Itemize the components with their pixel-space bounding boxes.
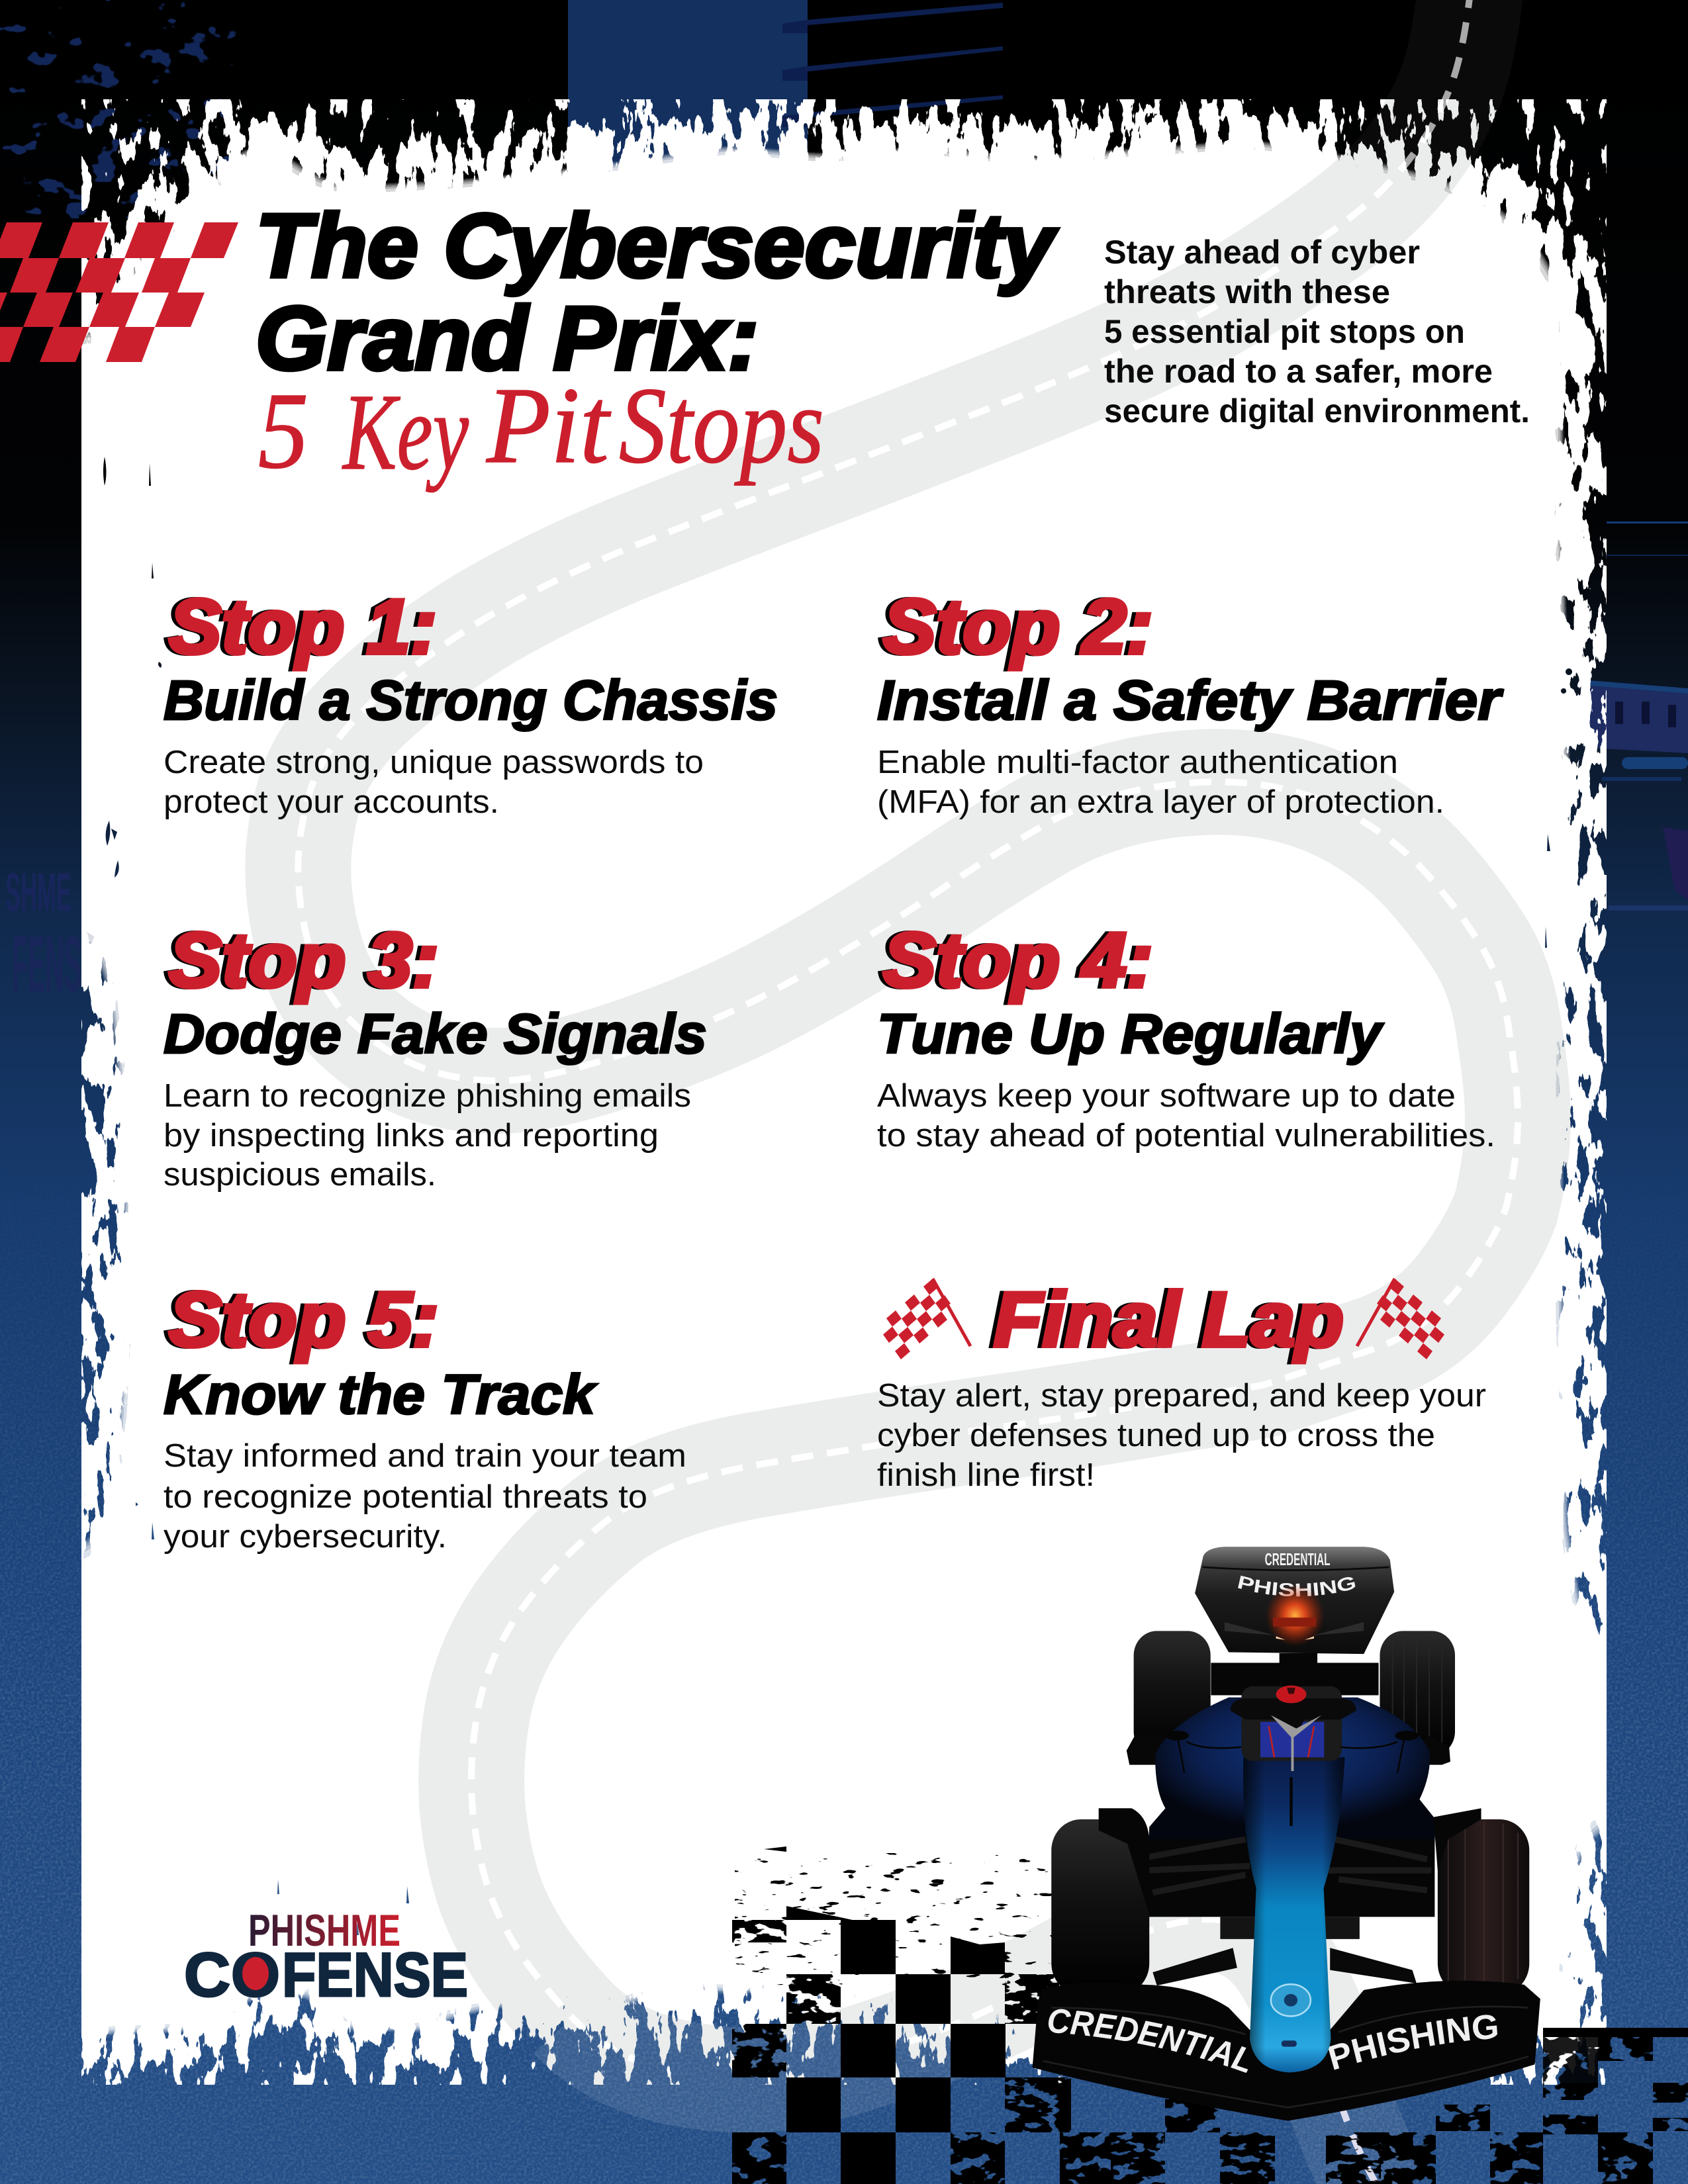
checkered flag ground xyxy=(732,1846,1688,2184)
mirrors xyxy=(1165,1731,1419,1773)
heading: Final Lap: Final Lap xyxy=(994,1276,1344,1363)
body text: finish line first! xyxy=(877,1457,1095,1493)
body text xyxy=(164,745,704,820)
body text: Create strong, unique passwords to xyxy=(164,745,704,780)
subheading: Know the Track xyxy=(164,1363,598,1426)
rear wing xyxy=(1195,1547,1394,1655)
rear lights xyxy=(1266,1584,1325,1647)
logo: PhishMe Cofense: PHISHME xyxy=(248,1905,400,1956)
body text: to recognize potential threats to xyxy=(164,1479,647,1515)
heading: Stop 4: Stop 4: xyxy=(883,917,1153,1003)
body text xyxy=(164,1078,691,1193)
intro text: Stay ahead of cyber xyxy=(1104,234,1420,271)
panel: stop 2 xyxy=(877,583,1504,820)
icon: right checkered flag xyxy=(1357,1279,1450,1359)
heading: Stop 3: Stop 3: xyxy=(169,917,439,1003)
body text xyxy=(164,1438,686,1555)
heading: Final Lap: Final Lap xyxy=(990,1276,1340,1363)
subtitle: 5 Key Pit Stops xyxy=(258,365,824,492)
title xyxy=(256,195,1058,388)
title: Grand Prix: xyxy=(256,288,759,388)
front tyres xyxy=(1051,1808,1529,1995)
race car: Credential Phishing xyxy=(1033,1547,1540,2120)
heading: Stop 4: Stop 4: xyxy=(879,917,1149,1003)
background: stadium night scene: FENS xyxy=(12,920,81,1009)
subheading: Install a Safety Barrier xyxy=(877,669,1504,731)
intro text: the road to a safer, more xyxy=(1104,353,1493,390)
body text: cyber defenses tuned up to cross the xyxy=(877,1418,1435,1453)
side pods xyxy=(1149,1698,1436,1844)
heading: Stop 5: Stop 5: xyxy=(165,1276,435,1363)
heading: Stop 1: Stop 1: xyxy=(165,583,433,670)
panel: stop 5 xyxy=(164,1276,686,1555)
intro text: secure digital environment. xyxy=(1104,392,1530,430)
body text: protect your accounts. xyxy=(164,784,499,820)
rear wing: CREDENTIAL xyxy=(1265,1551,1331,1569)
logo: PhishMe Cofense: O xyxy=(231,1940,280,2009)
body text: (MFA) for an extra layer of protection. xyxy=(877,784,1444,820)
heading: Stop 2: Stop 2: xyxy=(883,583,1153,670)
logo: PhishMe Cofense: C xyxy=(184,1940,230,2009)
body text: Stay alert, stay prepared, and keep your xyxy=(877,1378,1486,1414)
body text xyxy=(877,1078,1495,1154)
logo: PhishMe Cofense: FENSE xyxy=(282,1940,468,2009)
rear wing: PHISHING xyxy=(1238,1575,1356,1596)
icon: left checkered flag xyxy=(877,1279,970,1359)
body text xyxy=(877,745,1444,820)
background: stadium night scene: SHME xyxy=(5,862,71,923)
body text xyxy=(877,1378,1486,1493)
road on background xyxy=(572,0,1471,2184)
body text: your cybersecurity. xyxy=(164,1519,447,1555)
fender plates xyxy=(1127,1734,1450,1765)
intro text: threats with these xyxy=(1104,273,1390,310)
subtitle: 5 Key Pit Stops: Key xyxy=(342,371,469,492)
heading: Stop 3: Stop 3: xyxy=(165,917,435,1003)
front wing: PHISHING xyxy=(1329,2015,1497,2070)
title: The Cybersecurity xyxy=(256,195,1058,296)
front suspension xyxy=(1147,1839,1434,1985)
subtitle: 5 Key Pit Stops: Pit xyxy=(486,365,612,486)
body text: Enable multi-factor authentication xyxy=(877,745,1398,780)
rear tyres xyxy=(1134,1631,1455,1756)
body text: to stay ahead of potential vulnerabilities. xyxy=(877,1118,1495,1154)
intro text: 5 essential pit stops on xyxy=(1104,313,1465,350)
shards above checks xyxy=(735,1853,1053,1985)
subheading: Tune Up Regularly xyxy=(877,1003,1384,1065)
checkered flag corner mark xyxy=(0,222,238,362)
winding race track xyxy=(298,0,1518,2184)
panel: stop 3 xyxy=(164,917,707,1193)
front wing: CREDENTIAL xyxy=(1049,2009,1248,2073)
rear suspension xyxy=(1211,1653,1379,1695)
logo: PhishMe Cofense xyxy=(184,1905,468,2009)
intro text xyxy=(1104,234,1530,430)
nose cone xyxy=(1243,1757,1345,2072)
subtitle: 5 Key Pit Stops: Stops xyxy=(619,365,824,486)
body text: Learn to recognize phishing emails xyxy=(164,1078,691,1114)
body text: Always keep your software up to date xyxy=(877,1078,1456,1114)
front wing xyxy=(1033,1981,1540,2120)
subheading: Dodge Fake Signals xyxy=(164,1003,707,1065)
body text: by inspecting links and reporting xyxy=(164,1118,659,1154)
heading: Stop 1: Stop 1: xyxy=(169,583,437,670)
body text: suspicious emails. xyxy=(164,1157,436,1193)
panel: stop 1 xyxy=(164,583,778,820)
panel: stop 4 xyxy=(877,917,1495,1154)
subheading: Build a Strong Chassis xyxy=(164,669,778,731)
panel: final lap xyxy=(877,1276,1486,1493)
heading: Stop 5: Stop 5: xyxy=(169,1276,439,1363)
heading: Stop 2: Stop 2: xyxy=(879,583,1149,670)
body text: Stay informed and train your team xyxy=(164,1438,686,1474)
cockpit and halo xyxy=(1231,1686,1356,1771)
subtitle: 5 Key Pit Stops: 5 xyxy=(258,370,308,491)
